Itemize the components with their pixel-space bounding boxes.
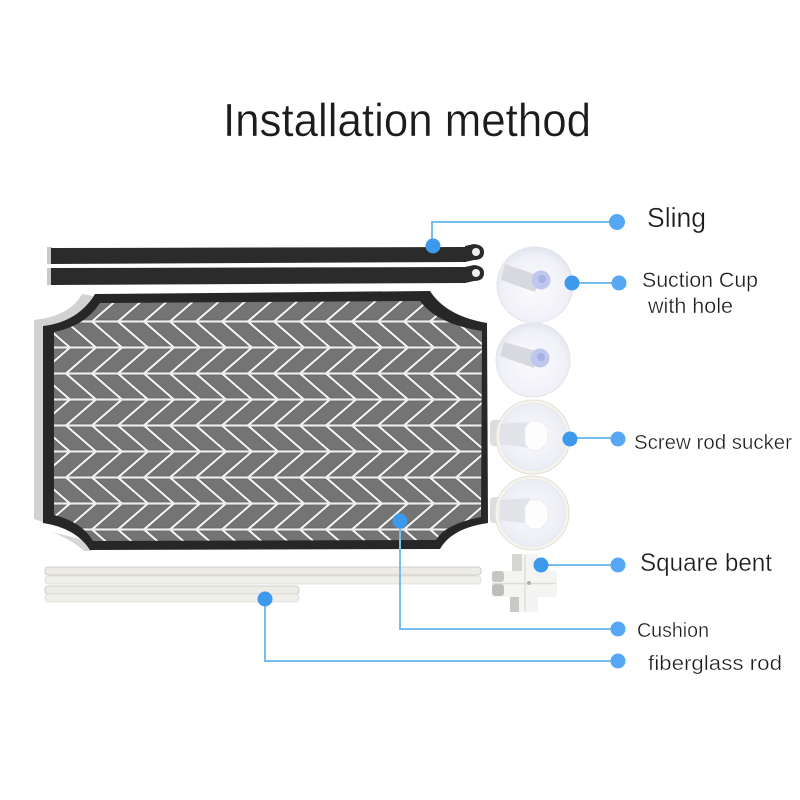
callout: fiberglass rod	[258, 592, 782, 675]
screw sucker 2	[490, 476, 569, 550]
callout: square bent: Square bent	[640, 549, 772, 577]
screw rod suckers	[490, 400, 570, 550]
callout: suction cup with hole: with hole	[647, 295, 733, 318]
title: Installation method	[223, 94, 591, 146]
callout: suction cup with hole	[564, 269, 758, 318]
callout: sling	[426, 202, 706, 254]
screw sucker 1	[490, 400, 570, 474]
callout: screw rod sucker: Screw rod sucker	[634, 432, 792, 454]
fiberglass rods	[45, 567, 481, 602]
callout: square bent	[534, 549, 772, 577]
cushion	[34, 290, 500, 552]
suction cups with hole	[496, 247, 573, 397]
callout: cushion: Cushion	[637, 620, 709, 642]
sling straps	[47, 244, 484, 285]
callout: screw rod sucker	[562, 432, 792, 454]
suction cup 2	[496, 323, 570, 397]
callout: sling: Sling	[647, 202, 706, 233]
suction cup 1	[497, 247, 573, 323]
callout: fiberglass rod: fiberglass rod	[648, 653, 782, 675]
callout: cushion	[392, 514, 709, 642]
square bent connector	[492, 554, 557, 612]
callout: suction cup with hole: Suction Cup	[642, 269, 758, 292]
